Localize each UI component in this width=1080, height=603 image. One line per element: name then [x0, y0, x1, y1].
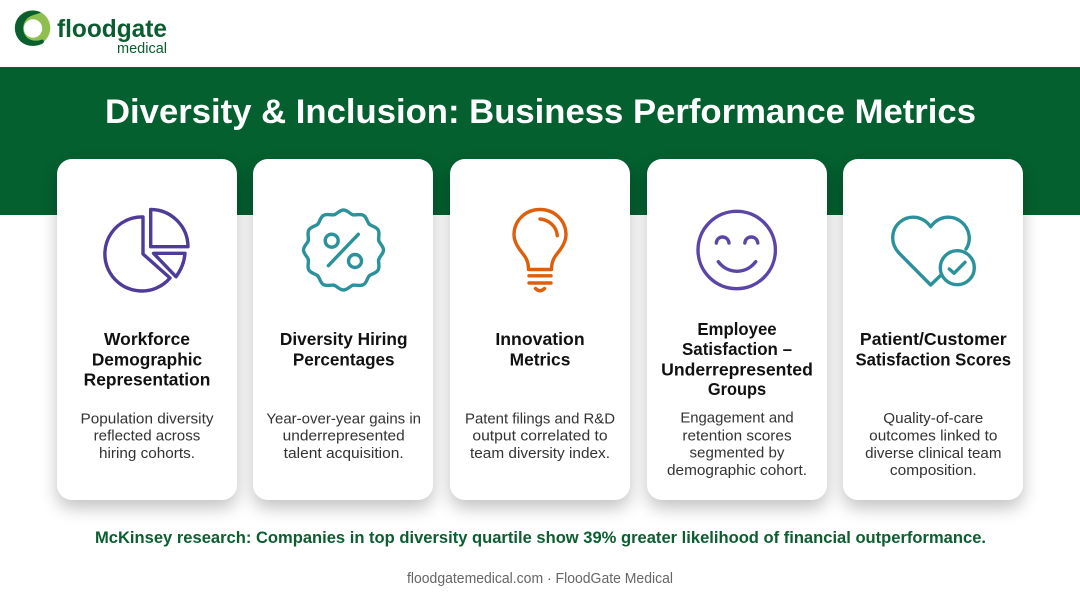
body text: workforce: [80, 410, 214, 462]
body text: workforce: Population diversity: [80, 410, 214, 427]
heading: employee satisfaction: Employee: [697, 319, 777, 339]
body text: workforce: reflected across: [94, 428, 200, 445]
icon: percent badge: [304, 210, 384, 290]
callout: McKinsey research: McKinsey research: Companies in top diversity quartile show 39% greater likelihood of financial outperformance.: [95, 529, 986, 547]
logo sub-wordmark: medical: [117, 41, 167, 57]
body text: patient customer: Quality-of-care: [883, 410, 983, 427]
body text: employee satisfaction: demographic cohort.: [667, 462, 807, 479]
body text: patient customer: outcomes linked to: [869, 428, 997, 444]
body text: patient customer: composition.: [890, 462, 977, 479]
body text: hiring: Year-over-year gains in: [266, 410, 421, 427]
body text: hiring: talent acquisition.: [284, 445, 404, 462]
heading: employee satisfaction: [661, 319, 813, 399]
heading: workforce: Representation: [84, 370, 210, 390]
heading: hiring: Diversity Hiring: [280, 329, 408, 349]
panel: diversity hiring percentages: [253, 159, 433, 500]
heading: workforce: Demographic: [92, 349, 202, 369]
body text: innovation: team diversity index.: [470, 445, 610, 462]
logo: floodgate medical: [14, 10, 167, 57]
body text: patient customer: diverse clinical team: [865, 445, 1001, 462]
header band: [0, 67, 1080, 215]
title: Diversity & Inclusion: Business Performance Metrics: [105, 93, 976, 131]
body text: employee satisfaction: retention scores: [682, 427, 792, 444]
panel: innovation metrics: [450, 159, 630, 500]
heading: employee satisfaction: Underrepresented: [661, 360, 813, 380]
body text: employee satisfaction: segmented by: [690, 445, 785, 462]
heading: patient customer: [855, 329, 1011, 369]
body text: innovation: [465, 410, 615, 462]
panel: workforce demographic representation: [57, 159, 237, 500]
body text: innovation: output correlated to: [472, 428, 608, 445]
heading: employee satisfaction: Groups: [708, 379, 766, 399]
heading: workforce: Workforce: [104, 329, 190, 349]
icon: pie chart: [105, 210, 188, 291]
body text: workforce: hiring cohorts.: [99, 445, 195, 462]
heading: employee satisfaction: Satisfaction –: [682, 339, 792, 359]
body text: employee satisfaction: [667, 410, 807, 479]
icon: smiley: [698, 211, 775, 289]
heading: workforce: [84, 329, 210, 390]
heading: innovation: [495, 329, 585, 369]
body text: hiring: underrepresented: [283, 428, 405, 445]
icon: lightbulb: [514, 210, 566, 291]
heading: hiring: [280, 329, 408, 369]
panel: patient customer satisfaction: [843, 159, 1023, 500]
body text: employee satisfaction: Engagement and: [680, 410, 794, 427]
body text: innovation: Patent filings and R&D: [465, 410, 615, 427]
body text: patient customer: [865, 410, 1001, 479]
footer: floodgatemedical.com · FloodGate Medical: [407, 571, 673, 587]
heading: patient customer: Satisfaction Scores: [855, 349, 1011, 369]
heading: innovation: Metrics: [510, 349, 571, 369]
heading: hiring: Percentages: [293, 349, 395, 369]
body text: hiring: [266, 410, 421, 462]
panel: employee satisfaction: [647, 159, 827, 500]
icon: logo swirl ring: [15, 10, 50, 46]
heading: innovation: Innovation: [495, 329, 585, 349]
logo wordmark: floodgate: [57, 15, 167, 43]
icon: heart with check: [893, 217, 974, 285]
heading: patient customer: Patient/Customer: [860, 329, 1007, 349]
